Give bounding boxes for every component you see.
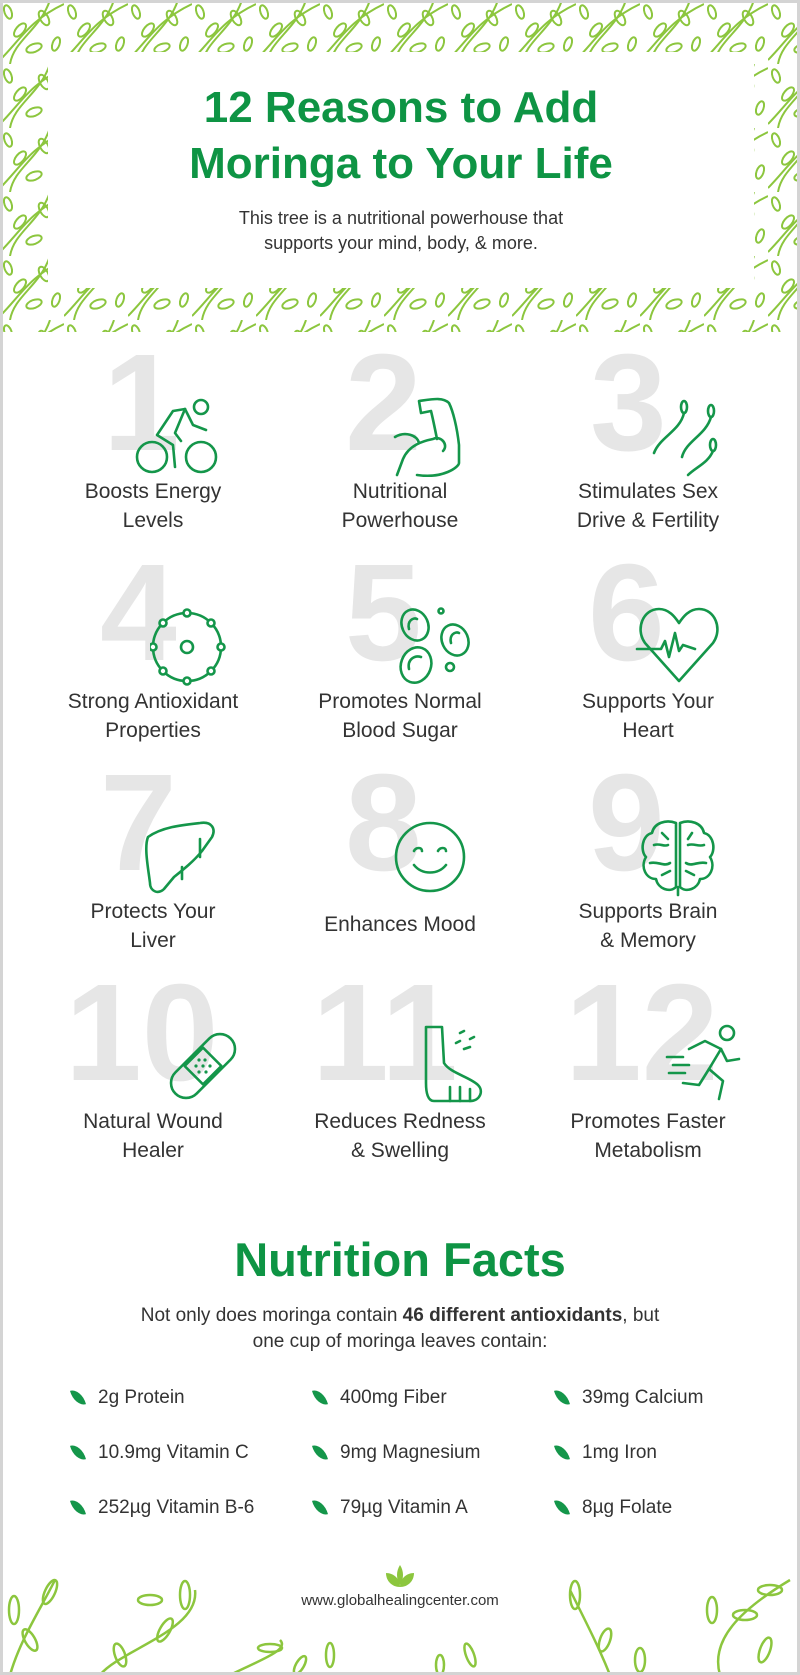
icon: runner: [666, 1024, 740, 1100]
icon: smile: [394, 822, 466, 892]
reason 12: [565, 956, 740, 1162]
nutrient list: 1mg Iron: [582, 1442, 657, 1463]
icon: antioxidant molecule: [150, 608, 226, 686]
reason 5: [318, 536, 482, 742]
reason 11: [312, 956, 486, 1162]
reason 4: 4: [100, 536, 177, 690]
bottom plants decoration: [8, 1578, 791, 1672]
reason 11: 11: [312, 956, 458, 1110]
reason 8: Enhances Mood: [324, 913, 476, 936]
title: [189, 83, 613, 188]
reason 7: Protects Your: [91, 900, 215, 923]
reason 3: [577, 326, 719, 532]
reason 7: Liver: [130, 929, 176, 952]
reason 10: [65, 956, 236, 1162]
reason 6: Heart: [622, 719, 674, 742]
reason 2: Nutritional: [353, 480, 447, 503]
nutrient list: 2g Protein: [98, 1387, 185, 1408]
icon: blood cells: [399, 607, 470, 684]
reason 9: 9: [588, 746, 665, 900]
reason 5: 5: [345, 536, 422, 690]
title: Moringa to Your Life: [189, 139, 613, 188]
icon: swollen foot: [424, 1026, 482, 1102]
reason 11: Reduces Redness: [314, 1110, 486, 1133]
title: 12 Reasons to Add: [204, 83, 598, 132]
subtitle: This tree is a nutritional powerhouse that: [239, 208, 563, 228]
subtitle: supports your mind, body, & more.: [264, 233, 538, 253]
nutrition facts heading: Nutrition Facts: [234, 1233, 566, 1286]
reason 1: [85, 326, 222, 532]
header pattern band: [3, 3, 797, 332]
reason 7: 7: [100, 746, 177, 900]
reason 8: [324, 746, 476, 936]
reason 2: [342, 326, 460, 532]
nutrition intro text: one cup of moringa leaves contain:: [253, 1331, 547, 1352]
reason 5: Blood Sugar: [342, 719, 458, 742]
reason 4: [68, 536, 238, 742]
reason 9: & Memory: [600, 929, 696, 952]
reason 7: [91, 746, 216, 952]
icon: heart pulse: [636, 608, 719, 682]
reason 10: 10: [65, 956, 218, 1110]
website url: www.globalhealingcenter.com: [301, 1592, 499, 1609]
icon: flexed arm: [394, 398, 460, 477]
reason 9: [579, 746, 717, 952]
header box: [48, 52, 754, 288]
reason 1: Levels: [123, 509, 183, 532]
reason 10: Healer: [122, 1139, 184, 1162]
icon: sperm: [652, 400, 718, 476]
nutrition intro text: Not only does moringa contain 46 different antioxidants, but: [141, 1305, 659, 1326]
icon: brain: [641, 820, 715, 896]
reason 4: Strong Antioxidant: [68, 690, 238, 713]
reason 12: Promotes Faster: [570, 1110, 726, 1133]
reasons grid: [65, 326, 740, 1162]
nutrient list: 10.9mg Vitamin C: [98, 1442, 249, 1463]
reason 12: 12: [565, 956, 718, 1110]
reason 1: Boosts Energy: [85, 480, 221, 503]
icon: liver: [145, 821, 215, 894]
nutrient list: 8µg Folate: [582, 1497, 672, 1518]
reason 11: & Swelling: [351, 1139, 449, 1162]
reason 3: Drive & Fertility: [577, 509, 719, 532]
reason 1: 1: [103, 326, 180, 480]
nutrient list: 39mg Calcium: [582, 1387, 703, 1408]
nutrient list: [70, 1387, 703, 1518]
logo icon: [386, 1565, 414, 1587]
reason 3: Stimulates Sex: [578, 480, 718, 503]
icon: bandage: [170, 1032, 236, 1100]
nutrient list: 9mg Magnesium: [340, 1442, 480, 1463]
nutrient list: 252µg Vitamin B-6: [98, 1497, 254, 1518]
reason 2: Powerhouse: [342, 509, 458, 532]
reason 2: 2: [345, 326, 422, 480]
reason 5: Promotes Normal: [318, 690, 482, 713]
reason 12: Metabolism: [594, 1139, 702, 1162]
reason 6: 6: [588, 536, 665, 690]
reason 6: Supports Your: [582, 690, 714, 713]
nutrition intro text: [141, 1305, 660, 1352]
reason 6: [582, 536, 719, 742]
reason 10: Natural Wound: [83, 1110, 223, 1133]
icon: cyclist: [136, 398, 218, 474]
reason 4: Properties: [105, 719, 201, 742]
reason 8: 8: [345, 746, 422, 900]
reason 9: Supports Brain: [579, 900, 717, 923]
reason 3: 3: [590, 326, 667, 480]
subtitle: [239, 208, 563, 253]
nutrient list: 400mg Fiber: [340, 1387, 447, 1408]
nutrient list: 79µg Vitamin A: [340, 1497, 468, 1518]
